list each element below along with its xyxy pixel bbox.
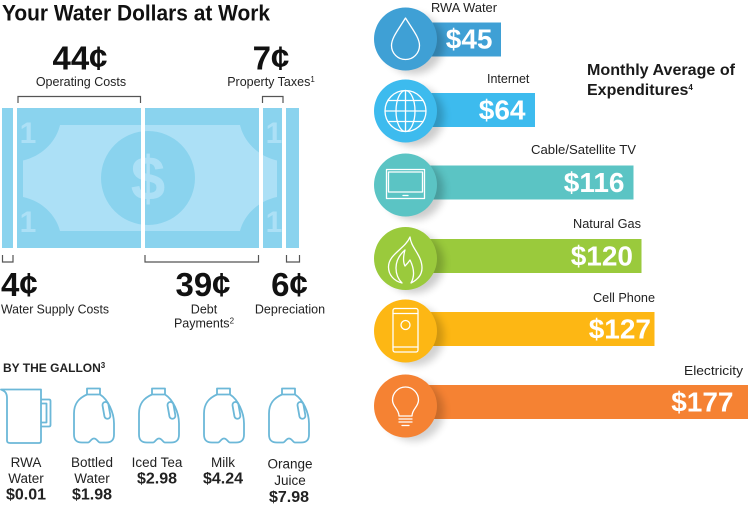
price: orange juice: Orange [267, 456, 313, 472]
label: 4 cents water supply costs: 4¢ [1, 266, 38, 303]
price: iced tea: Iced Tea [132, 455, 183, 470]
bar: electricity: Electricity [684, 364, 744, 378]
bar: electricity [374, 364, 748, 441]
label: 39 cents debt payments: Debt [191, 302, 218, 316]
label: 7 cents property taxes: 1 [310, 75, 315, 84]
icon: bottled water jug [74, 388, 114, 442]
icon: smartphone [393, 308, 418, 352]
price: milk: $4.24 [203, 470, 243, 488]
bar: cell phone: $127 [589, 314, 651, 344]
bar: cable/satellite TV: $116 [564, 167, 624, 198]
label: 4 cents water supply costs [1, 255, 109, 316]
bar: cable/satellite TV: Cable/Satellite TV [531, 143, 637, 157]
icon: orange juice jug [269, 388, 309, 442]
price: milk: Milk [211, 455, 235, 470]
heading: monthly average of expenditures [587, 62, 736, 99]
dollar bill graphic: 1 [20, 117, 36, 150]
price: orange juice: $7.98 [269, 489, 309, 506]
icon: light bulb [392, 387, 418, 426]
label: 39 cents debt payments: Payments [174, 316, 230, 330]
bar: RWA water: $45 [446, 24, 492, 54]
bar: natural gas [374, 217, 642, 293]
price: RWA water: $0.01 [6, 486, 46, 504]
dollar bill graphic: $ [131, 145, 165, 214]
bar: RWA water: RWA Water [431, 1, 497, 15]
price: bottled water: $1.98 [72, 486, 112, 504]
price: RWA water: Water [8, 471, 44, 486]
label: 39 cents debt payments [145, 255, 258, 330]
label: 6 cents depreciation: Depreciation [255, 302, 325, 316]
icon: iced tea jug [139, 388, 179, 442]
price: orange juice [267, 456, 313, 506]
price: bottled water: Bottled [71, 455, 113, 470]
bar: natural gas: $120 [571, 240, 633, 272]
icon: television [386, 170, 424, 198]
label: 39 cents debt payments: 2 [230, 316, 235, 326]
heading: monthly average of expenditures: 4 [688, 83, 693, 92]
bar: cell phone: Cell Phone [593, 291, 655, 305]
price: iced tea [132, 455, 183, 488]
price: iced tea: $2.98 [137, 470, 177, 488]
price: bottled water: Water [74, 471, 110, 486]
label: 7 cents property taxes [227, 40, 315, 103]
icon: milk jug [204, 388, 244, 442]
icon: water drop [392, 18, 420, 60]
label: 7 cents property taxes: 7¢ [253, 40, 289, 76]
label: 6 cents depreciation: 6¢ [271, 266, 308, 303]
price: RWA water [6, 455, 46, 504]
heading: by the gallon: BY THE GALLON [3, 361, 101, 375]
bar: internet: $64 [479, 94, 526, 126]
label: 4 cents water supply costs: Water Supply Costs [1, 302, 109, 316]
price: bottled water [71, 455, 113, 504]
heading: by the gallon: 3 [101, 361, 106, 370]
price: orange juice: Juice [274, 473, 306, 488]
label: 44 cents operating costs: Operating Costs [36, 75, 126, 89]
label: 44 cents operating costs [18, 40, 140, 103]
price: RWA water: RWA [11, 455, 41, 470]
icon: flame [388, 237, 422, 283]
bar: cell phone [374, 291, 655, 366]
icon: pitcher [1, 390, 50, 443]
bar: internet: Internet [487, 72, 530, 86]
heading: monthly average of expenditures: Monthly Average of [587, 62, 736, 79]
label: 6 cents depreciation [255, 255, 325, 316]
icon: globe [385, 90, 426, 132]
heading: monthly average of expenditures: Expenditures [587, 82, 688, 99]
bar: RWA water [374, 1, 501, 74]
bar: electricity: $177 [671, 386, 734, 418]
label: 44 cents operating costs: 44¢ [52, 40, 108, 76]
label: 7 cents property taxes: Property Taxes [227, 75, 310, 89]
title: Your Water Dollars at Work [2, 0, 270, 26]
bar: cable/satellite TV [374, 143, 637, 220]
dollar bill graphic: 1 [266, 117, 282, 150]
dollar bill graphic: 1 [266, 206, 282, 239]
dollar bill graphic [0, 108, 300, 248]
price: milk [203, 455, 243, 488]
bar: natural gas: Natural Gas [573, 217, 641, 231]
label: 39 cents debt payments: 39¢ [175, 266, 231, 303]
bar: internet [374, 72, 535, 146]
dollar bill graphic: 1 [20, 206, 36, 239]
